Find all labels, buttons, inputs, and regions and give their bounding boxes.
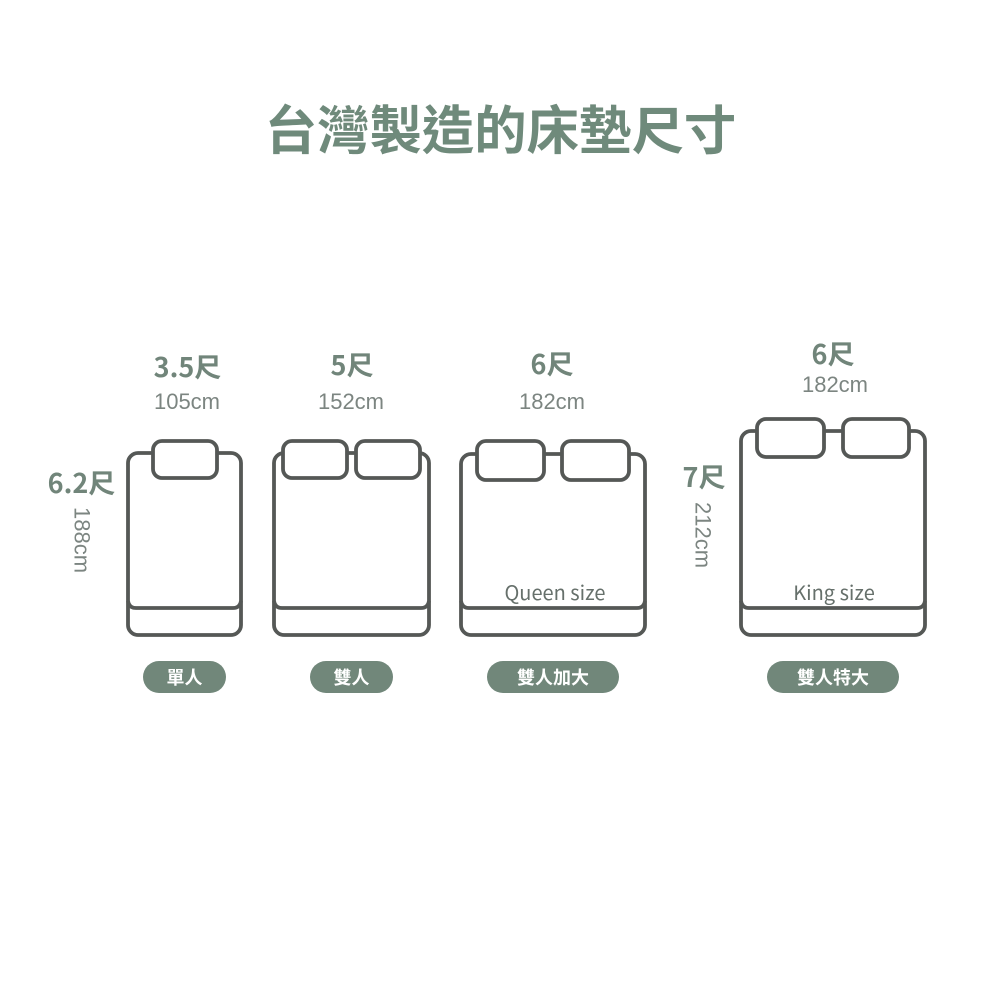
badge: king xyxy=(767,661,899,693)
left pillow xyxy=(283,441,347,478)
bed outline xyxy=(461,454,645,635)
right pillow xyxy=(356,441,420,478)
mattress edge xyxy=(461,601,645,608)
panel: king bed xyxy=(683,333,925,693)
width label: 105cm: 105cm xyxy=(154,389,220,414)
panel: queen bed xyxy=(461,343,645,693)
height label: 7 chi: 7尺 xyxy=(683,456,725,495)
King size label: King size xyxy=(793,577,875,606)
left pillow xyxy=(477,441,544,480)
bed outline xyxy=(128,453,241,635)
width label: 6 chi: 6尺 xyxy=(531,343,573,382)
width label: 5 chi: 5尺 xyxy=(331,344,373,383)
height label: 188cm: 188cm xyxy=(70,507,94,573)
width label: 3.5 chi: 3.5尺 xyxy=(154,346,221,385)
mattress edge xyxy=(741,601,925,608)
width label: 182cm: 182cm xyxy=(802,372,868,397)
badge: queen xyxy=(487,661,619,693)
badge: single xyxy=(143,661,226,693)
Queen size label: Queen size xyxy=(504,577,606,606)
height label: 6.2 chi: 6.2尺 xyxy=(48,462,115,501)
badge: double xyxy=(310,661,393,693)
bed outline xyxy=(741,431,925,635)
badge: queen: 雙人加大 xyxy=(517,664,589,690)
width label: 182cm: 182cm xyxy=(519,389,585,414)
panel: double bed xyxy=(274,344,429,693)
width label: 6 chi: 6尺 xyxy=(812,333,854,372)
mattress edge xyxy=(128,601,241,608)
right pillow xyxy=(562,441,629,480)
panel: single bed xyxy=(48,346,241,693)
height label: 212cm: 212cm xyxy=(690,502,716,568)
bed outline xyxy=(274,453,429,635)
title: 台灣製造的床墊尺寸 xyxy=(265,89,736,165)
badge: double: 雙人 xyxy=(334,664,370,690)
right pillow xyxy=(843,419,909,457)
width label: 152cm: 152cm xyxy=(318,389,384,414)
badge: single: 單人 xyxy=(166,664,202,690)
mattress edge xyxy=(274,601,429,608)
pillow xyxy=(153,441,217,478)
badge: king: 雙人特大 xyxy=(797,664,869,690)
left pillow xyxy=(757,419,824,457)
